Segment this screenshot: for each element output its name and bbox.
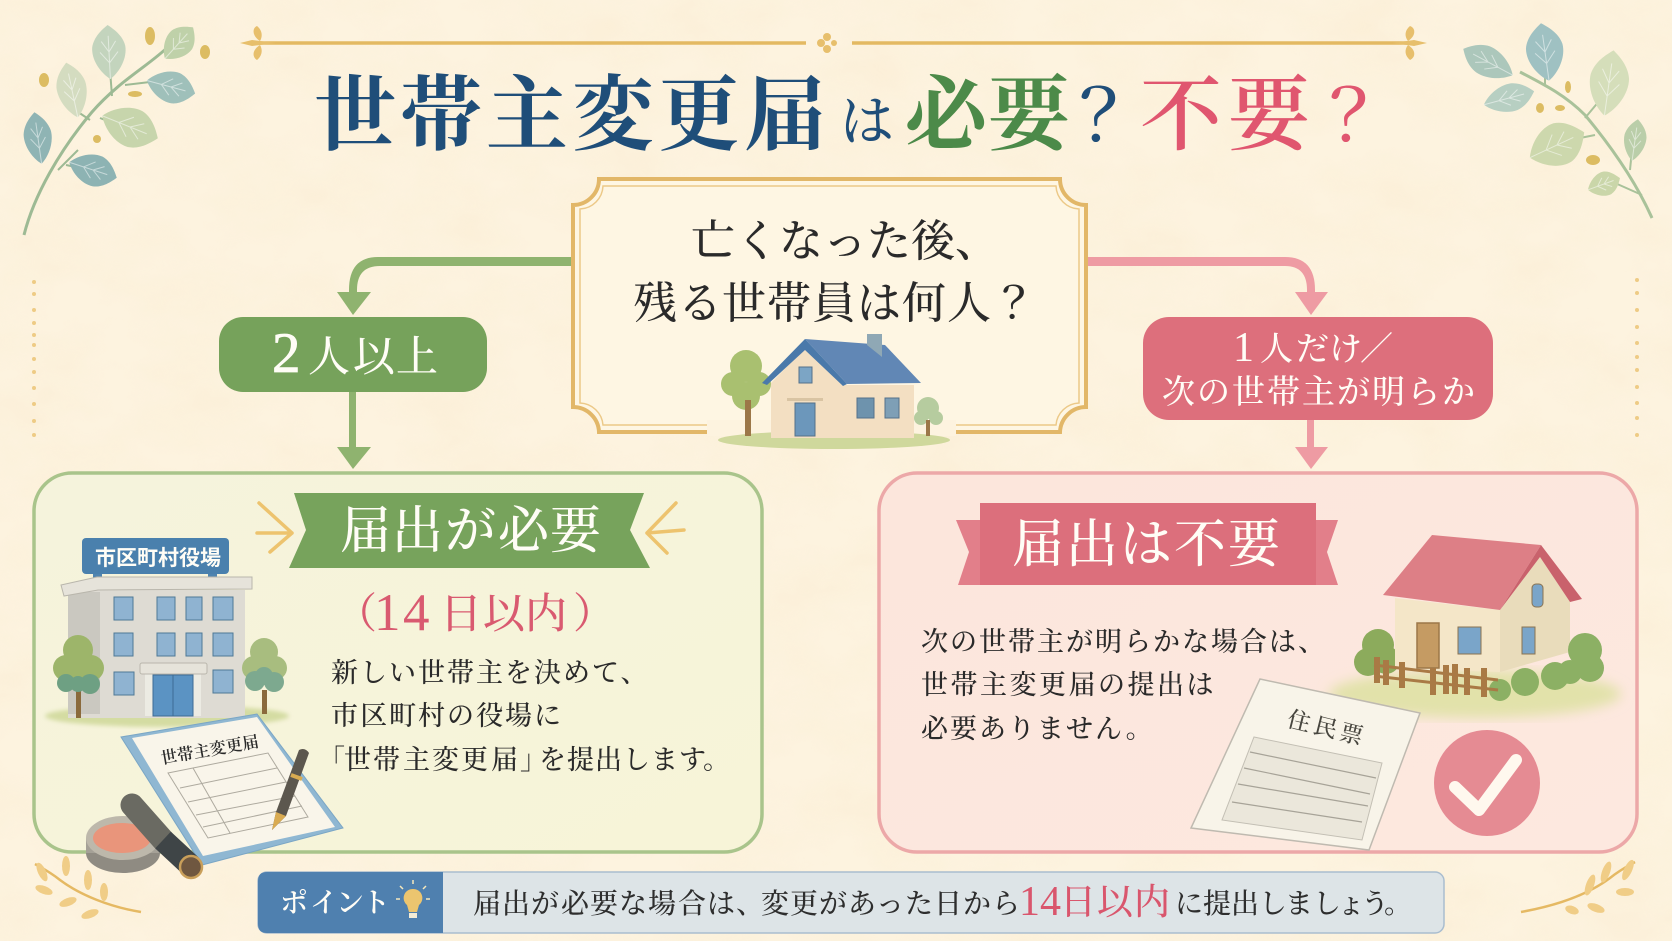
point message: 14 [1019, 879, 1061, 925]
gold rays right [647, 503, 684, 553]
left dotted decoration [32, 280, 36, 437]
question box [573, 179, 1086, 436]
option pill: one person [1143, 317, 1493, 420]
option pill: one person: 次の世帯主が明らか [1162, 374, 1475, 411]
title [314, 70, 1385, 161]
point label: ポイント [280, 888, 390, 919]
option pill: one person: 人だけ／ [1260, 332, 1393, 368]
title: ？ [1063, 77, 1135, 157]
body text: not required: 世帯主変更届の提出は [921, 670, 1216, 700]
body text: not required [921, 627, 1327, 744]
point label [258, 872, 443, 933]
icon: resident record document: 住民票 [1285, 707, 1369, 750]
body text: not required: 次の世帯主が明らかな場合は、 [921, 627, 1327, 657]
title: は [840, 92, 894, 152]
right dotted decoration [1635, 278, 1639, 437]
deadline text: （ [335, 592, 377, 638]
icon: check mark badge [1434, 730, 1540, 836]
icon: city office building [45, 538, 289, 727]
bottom right sprig [1521, 858, 1636, 916]
body text: required: 「世帯主変更届」を提出します。 [318, 745, 730, 775]
deadline text: 14 [374, 584, 430, 642]
bottom left sprig [34, 856, 141, 921]
title: 必要 [905, 70, 1073, 161]
body text: not required: 必要ありません。 [921, 714, 1155, 744]
question text: 亡くなった後、 [691, 217, 999, 266]
point message: 日以内 [1060, 882, 1170, 922]
ribbon heading: filing not required: 届出は不要 [1012, 517, 1280, 574]
title: 不要 [1140, 70, 1311, 161]
point message: 届出が必要な場合は、変更があった日から [473, 888, 1020, 920]
point message [473, 879, 1412, 925]
sign: city office: 市区町村役場 [95, 547, 221, 570]
body text: required: 新しい世帯主を決めて、 [331, 658, 649, 688]
question text [633, 217, 1036, 328]
title: 世帯主変更届 [314, 70, 826, 161]
ribbon heading: filing not required [956, 503, 1338, 585]
panel: filing not required [879, 473, 1637, 852]
point bar [258, 872, 1444, 933]
deadline text: 日以内） [440, 592, 615, 638]
panel: filing required [34, 473, 762, 878]
green branch arrow from question [337, 257, 574, 315]
option pill: two or more [219, 317, 487, 392]
ribbon heading: filing required: 届出が必要 [340, 504, 601, 560]
icon: fountain pen [272, 749, 309, 830]
top ornament line [240, 26, 1427, 60]
arrow: two or more to required [337, 392, 371, 469]
point message: に提出しましょう。 [1175, 888, 1412, 920]
option pill: one person: 1 [1233, 325, 1254, 371]
ribbon heading: filing required [289, 493, 650, 568]
title: ？ [1313, 77, 1385, 157]
icon: light bulb [396, 880, 430, 918]
right leaf sprig [1456, 21, 1652, 218]
icon: notification form on clipboard [121, 714, 343, 865]
option pill: two or more: 2 [272, 322, 300, 385]
arrow: one person to not required [1295, 420, 1328, 469]
icon: notification form on clipboard: 世帯主変更届 [159, 732, 260, 768]
icon: ink pad and seal [86, 805, 202, 878]
pink branch arrow from question [1086, 257, 1328, 315]
body text: required [318, 658, 730, 775]
option pill: two or more: 人以上 [308, 335, 438, 381]
body text: required: 市区町村の役場に [331, 701, 563, 731]
icon: house with blue roof [718, 334, 950, 449]
icon: resident record document [1191, 679, 1420, 850]
left leaf sprig [21, 18, 210, 235]
icon: house with red roof [1329, 535, 1621, 718]
gold rays left [257, 503, 292, 552]
question text: 残る世帯員は何人？ [633, 279, 1036, 328]
deadline text [335, 584, 615, 642]
sign: city office [82, 538, 229, 574]
